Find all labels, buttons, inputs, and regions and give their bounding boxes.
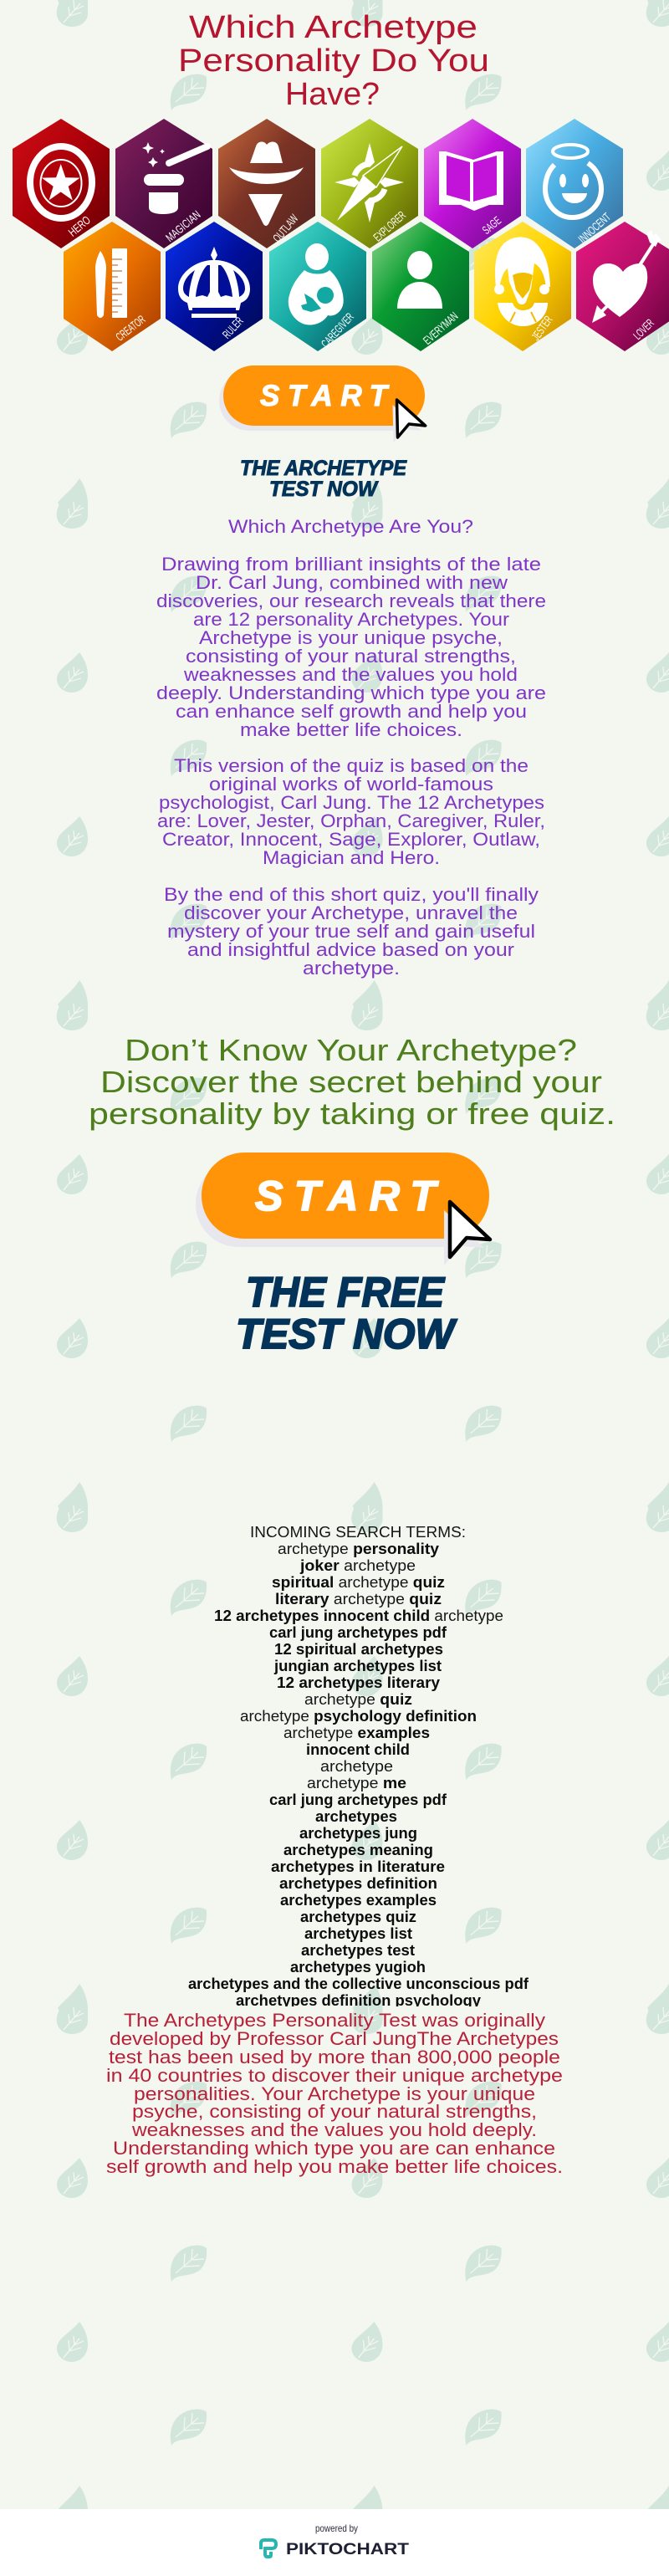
title: Personality Do You (178, 43, 489, 79)
hexagon: sage (424, 119, 521, 248)
footer: powered by piktochart: PIKTOCHART (286, 2541, 409, 2558)
hexagon: everyman (372, 222, 469, 351)
text block: which archetype are you: and insightful advice based on your (187, 939, 514, 960)
text block: which archetype are you: psychologist, Carl Jung. The 12 Archetypes (159, 792, 544, 813)
heading: don't know your archetype: personality by taking or free quiz. (89, 1096, 615, 1131)
text block: test description: The Archetypes Personality Test was originally (124, 2010, 545, 2031)
hexagon: magician: MAGICIAN (163, 207, 203, 244)
icon: cursor large (444, 1202, 490, 1265)
icon: cursor small (393, 400, 426, 442)
hexagon: jester: JESTER (529, 313, 555, 343)
text block: test description: developed by Professor Carl JungThe Archetypes (110, 2028, 559, 2049)
heading: the free test now: THE FREE (246, 1269, 446, 1316)
search terms list: joker archetype (299, 1557, 416, 1574)
search terms list: archetype psychology definition (240, 1708, 477, 1725)
search terms list: INCOMING SEARCH TERMS: (250, 1524, 466, 1541)
title: Have? (285, 77, 380, 112)
text block: which archetype are you: Dr. Carl Jung, combined with new (196, 572, 508, 593)
hexagon: creator: CREATOR (113, 312, 148, 344)
search terms list: spiritual archetype quiz (272, 1574, 445, 1591)
hexagon: outlaw: OUTLAW (270, 212, 301, 244)
start button small: START (260, 380, 390, 412)
hexagon: ruler: RULER (220, 314, 246, 341)
search terms list: innocent child (306, 1741, 410, 1758)
search terms list: archetype quiz (304, 1691, 412, 1708)
hexagon: jester (474, 222, 571, 351)
text block: which archetype are you: original works of world-famous (209, 774, 493, 795)
hexagon: caregiver (269, 222, 366, 351)
text block: which archetype are you: make better life choices. (240, 719, 462, 740)
search terms list: literary archetype quiz (275, 1591, 442, 1607)
search terms list: 12 archetypes innocent child archetype (214, 1607, 503, 1624)
heading: the free test now: TEST NOW (236, 1311, 457, 1357)
search terms list: carl jung archetypes pdf (269, 1791, 447, 1808)
hexagon: creator (64, 222, 161, 351)
hexagon: everyman: EVERYMAN (421, 309, 461, 347)
text block: which archetype are you: Magician and Hero. (263, 847, 440, 868)
hexagon: hero: HERO (66, 213, 93, 239)
text block: which archetype are you: Which Archetype Are You? (228, 516, 473, 537)
search terms list: archetypes jung (299, 1825, 417, 1842)
search terms list: archetypes in literature (271, 1858, 445, 1875)
search terms list: jungian archetypes list (273, 1658, 442, 1674)
heading: the archetype test now (240, 457, 407, 501)
search terms list: archetypes list (304, 1925, 412, 1942)
text block: which archetype are you (156, 516, 546, 979)
footer: powered by piktochart (0, 2509, 669, 2576)
search terms list: archetype me (307, 1775, 406, 1791)
search terms list: archetype personality (278, 1541, 439, 1557)
start button large: START (255, 1173, 439, 1219)
heading: don't know your archetype (89, 1033, 615, 1131)
text block: which archetype are you: Archetype is your unique psyche, (199, 627, 503, 648)
heading: the archetype test now: THE ARCHETYPE (240, 457, 407, 480)
hexagon: innocent (526, 119, 623, 248)
text block: which archetype are you: deeply. Understanding which type you are (156, 682, 546, 703)
hexagon: magician (115, 119, 212, 248)
search terms list: 12 spiritual archetypes (274, 1641, 443, 1658)
hexagon: explorer (321, 119, 418, 248)
text block: test description: test has been used by more than 800,000 people (109, 2047, 560, 2067)
search terms list: archetypes test (301, 1942, 415, 1959)
search terms list (188, 1524, 529, 2009)
text block: which archetype are you: consisting of your natural strengths, (186, 646, 516, 667)
text block: which archetype are you: archetype. (303, 958, 400, 979)
text block: which archetype are you: can enhance self growth and help you (176, 701, 527, 722)
hexagon: caregiver: CAREGIVER (319, 310, 356, 350)
text block: test description (106, 2010, 563, 2177)
search terms list: archetypes definition (279, 1875, 437, 1892)
search terms list: archetypes (315, 1808, 397, 1825)
text block: which archetype are you: discover your Archetype, unravel the (184, 902, 518, 923)
hexagon: innocent: INNOCENT (575, 210, 613, 246)
text block: test description: personalities. Your Archetype is your unique (134, 2083, 535, 2104)
start button large (196, 1153, 490, 1265)
text block: which archetype are you: weaknesses and the values you hold (183, 664, 518, 685)
heading: don't know your archetype: Don’t Know Your Archetype? (125, 1033, 577, 1067)
search terms list: archetypes yugioh (290, 1959, 426, 1975)
search terms list: carl jung archetypes pdf (269, 1624, 447, 1641)
text block: which archetype are you: are 12 personality Archetypes. Your (193, 609, 509, 630)
text block: which archetype are you: Creator, Innocent, Sage, Explorer, Outlaw, (162, 829, 540, 850)
hexagon: outlaw (218, 119, 315, 248)
hexagon archetype grid (13, 119, 669, 351)
text block: which archetype are you: Drawing from brilliant insights of the late (161, 554, 541, 575)
search terms list: archetypes meaning (283, 1842, 433, 1858)
text block: test description: Understanding which type you are can enhance (113, 2138, 555, 2159)
footer: powered by piktochart: powered by (315, 2522, 358, 2534)
hexagon: ruler (166, 222, 263, 351)
text block: which archetype are you: discoveries, our research reveals that there (156, 590, 546, 611)
text block: test description: self growth and help you make better life choices. (106, 2156, 563, 2177)
search terms list: archetype (320, 1758, 393, 1775)
title (178, 10, 489, 112)
icon: piktochart logo (261, 2540, 276, 2557)
hexagon: lover: LOVER (631, 316, 656, 342)
text block: test description: psyche, consisting of your natural strengths, (132, 2101, 537, 2122)
text block: which archetype are you: are: Lover, Jester, Orphan, Caregiver, Ruler, (157, 810, 545, 831)
heading: the archetype test now: TEST NOW (269, 478, 379, 501)
text block: test description: weaknesses and the values you hold deeply. (131, 2119, 537, 2140)
text block: which archetype are you: By the end of this short quiz, you'll finally (164, 884, 539, 905)
text block: which archetype are you: This version of the quiz is based on the (174, 755, 529, 776)
search terms list: archetypes and the collective unconscious pdf (188, 1975, 529, 1992)
hexagon: lover (576, 222, 669, 351)
hexagon: explorer: EXPLORER (370, 208, 408, 244)
text block: which archetype are you: mystery of your true self and gain useful (167, 921, 535, 942)
text block: test description: in 40 countries to discover their unique archetype (106, 2065, 563, 2086)
search terms list: archetypes examples (280, 1892, 437, 1909)
search terms list: archetypes quiz (300, 1909, 416, 1925)
start button small (219, 365, 426, 442)
hexagon: hero (13, 119, 110, 248)
title: Which Archetype (189, 10, 477, 45)
hexagon: sage: SAGE (479, 213, 503, 237)
heading: don't know your archetype: Discover the secret behind your (100, 1065, 602, 1099)
search terms list: archetype examples (283, 1725, 430, 1741)
search terms list: 12 archetypes literary (277, 1674, 440, 1691)
search terms list: archetypes definition psychology (236, 1992, 481, 2009)
heading: the free test now (236, 1269, 457, 1357)
